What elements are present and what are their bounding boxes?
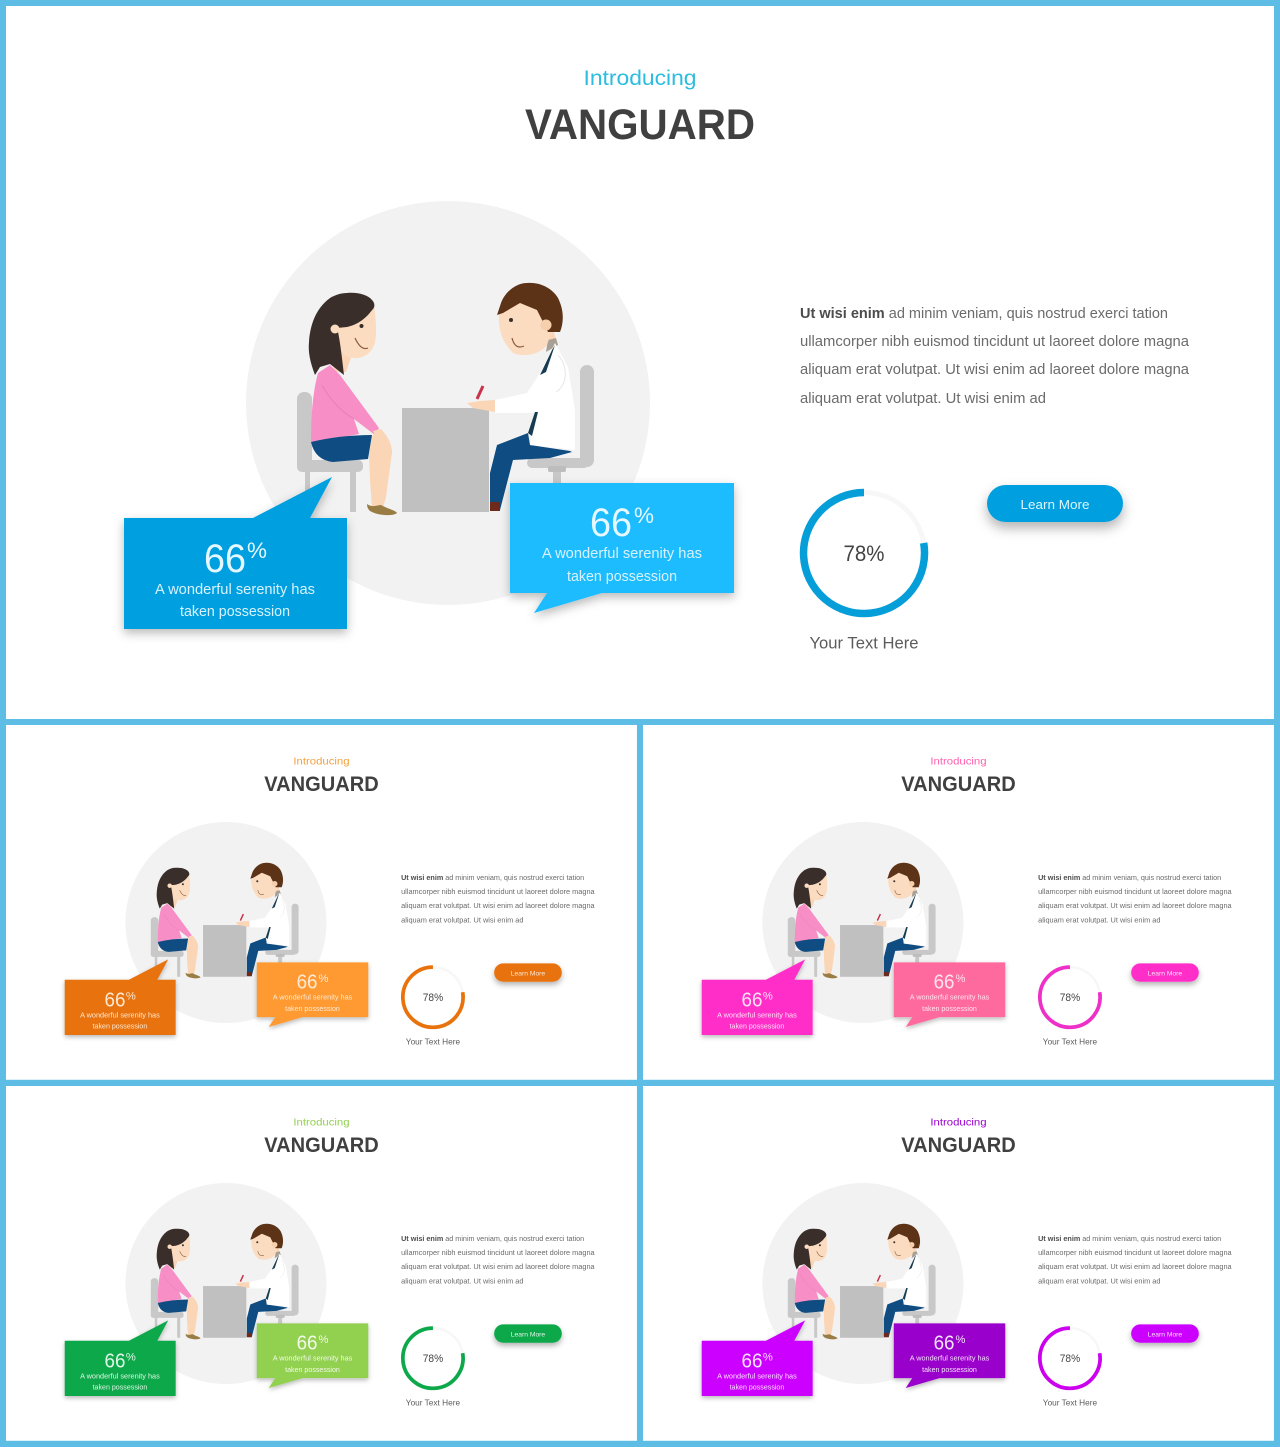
panel: blue main slide [6, 6, 1274, 719]
panel: pink slide [643, 725, 1274, 1080]
button: learn more [494, 963, 562, 982]
text block: Ut wisi enim ad minim veniam, quis nostrud exerci tation [1038, 1234, 1221, 1243]
donut chart: 78% [403, 967, 463, 1047]
callout: right [510, 483, 734, 613]
button: learn more: Learn More [511, 1331, 546, 1338]
callout: right: taken possession [285, 1365, 340, 1374]
text block: ullamcorper nibh euismod tincidunt ut laoreet dolore magna [401, 1248, 595, 1257]
illustration: patient and doctor at desk [762, 1183, 963, 1384]
callout: left [124, 477, 347, 629]
callout: left: A wonderful serenity has [155, 581, 315, 598]
subtitle: Introducing [293, 1117, 350, 1128]
callout: right: % [634, 503, 654, 528]
donut chart: 78% [1040, 967, 1100, 1047]
callout: left: 66 [742, 990, 762, 1012]
button: learn more: Learn More [511, 970, 546, 977]
title: VANGUARD [264, 1133, 379, 1157]
subtitle: Introducing [930, 1117, 987, 1128]
callout: left: A wonderful serenity has [717, 1011, 797, 1020]
text block [800, 306, 1190, 407]
button: learn more: Learn More [1148, 970, 1183, 977]
callout: right: % [318, 973, 329, 985]
callout: left: A wonderful serenity has [717, 1372, 797, 1381]
text block: ullamcorper nibh euismod tincidunt ut laoreet dolore magna [800, 334, 1190, 350]
title: VANGUARD [901, 1133, 1016, 1157]
callout: left: taken possession [180, 603, 290, 620]
callout: right: % [955, 1334, 966, 1346]
callout: right: % [955, 973, 966, 985]
text block: Ut wisi enim ad minim veniam, quis nostrud exerci tation [800, 306, 1168, 322]
illustration: patient and doctor at desk [125, 1183, 326, 1384]
panel: purple slide [643, 1086, 1274, 1441]
donut chart: 78% [1040, 1328, 1100, 1408]
callout: right: taken possession [567, 568, 677, 585]
button: learn more [494, 1324, 562, 1343]
title: VANGUARD [264, 772, 379, 796]
text block: aliquam erat volutpat. Ut wisi enim ad [800, 391, 1046, 407]
donut chart: 78%: 78% [1060, 1353, 1080, 1365]
text block [401, 1234, 595, 1286]
callout: right: taken possession [285, 1004, 340, 1013]
callout: left: 66 [105, 1351, 125, 1373]
callout: left: % [247, 538, 267, 563]
button: learn more [987, 485, 1123, 522]
callout: right: 66 [590, 501, 632, 545]
callout: left: taken possession [93, 1383, 147, 1392]
text block [401, 873, 595, 925]
subtitle: Introducing [930, 756, 987, 767]
subtitle: Introducing [584, 67, 696, 90]
donut chart: 78%: 78% [844, 541, 884, 566]
callout: right: A wonderful serenity has [273, 993, 353, 1002]
callout: left: % [126, 1352, 136, 1364]
donut chart: 78% [804, 492, 925, 652]
text block: aliquam erat volutpat. Ut wisi enim ad laoreet dolore magna [401, 901, 595, 910]
panel: green slide [6, 1086, 637, 1441]
illustration: patient and doctor at desk [125, 822, 326, 1023]
donut chart: 78%: Your Text Here [406, 1399, 460, 1408]
text block: Ut wisi enim ad minim veniam, quis nostrud exerci tation [401, 873, 584, 882]
callout: right: A wonderful serenity has [910, 993, 990, 1002]
donut chart: 78%: 78% [423, 1353, 443, 1365]
text block: aliquam erat volutpat. Ut wisi enim ad [401, 916, 524, 925]
callout: right: A wonderful serenity has [273, 1354, 353, 1363]
donut chart: 78%: Your Text Here [810, 634, 918, 652]
text block: aliquam erat volutpat. Ut wisi enim ad laoreet dolore magna [800, 362, 1190, 378]
callout: left: 66 [204, 537, 246, 581]
callout: left: A wonderful serenity has [80, 1372, 160, 1381]
donut chart: 78%: Your Text Here [1043, 1399, 1097, 1408]
subtitle: Introducing [293, 756, 350, 767]
callout: left: 66 [105, 990, 125, 1012]
callout: right: A wonderful serenity has [542, 545, 702, 562]
callout: left: 66 [742, 1351, 762, 1373]
donut chart: 78%: Your Text Here [406, 1038, 460, 1047]
title: VANGUARD [901, 772, 1016, 796]
illustration: patient and doctor at desk [246, 201, 650, 605]
callout: left: % [126, 991, 136, 1003]
callout: right: taken possession [922, 1365, 977, 1374]
text block [1038, 1234, 1232, 1286]
title: VANGUARD [525, 101, 755, 149]
callout: right: 66 [934, 1333, 954, 1355]
donut chart: 78%: 78% [1060, 992, 1080, 1004]
text block: aliquam erat volutpat. Ut wisi enim ad laoreet dolore magna [1038, 901, 1232, 910]
callout: left [65, 1320, 176, 1396]
text block: aliquam erat volutpat. Ut wisi enim ad [1038, 1277, 1161, 1286]
button: learn more: Learn More [1148, 1331, 1183, 1338]
text block: ullamcorper nibh euismod tincidunt ut laoreet dolore magna [1038, 1248, 1232, 1257]
callout: right [257, 1323, 368, 1388]
donut chart: 78%: 78% [423, 992, 443, 1004]
callout: left: % [763, 991, 773, 1003]
callout: right [894, 1323, 1005, 1388]
callout: right: taken possession [922, 1004, 977, 1013]
callout: right [894, 962, 1005, 1027]
text block: aliquam erat volutpat. Ut wisi enim ad [401, 1277, 524, 1286]
button: learn more: Learn More [1020, 497, 1090, 512]
donut chart: 78% [403, 1328, 463, 1408]
callout: left: taken possession [730, 1022, 784, 1031]
text block: aliquam erat volutpat. Ut wisi enim ad laoreet dolore magna [1038, 1262, 1232, 1271]
callout: right [257, 962, 368, 1027]
callout: left [702, 959, 813, 1035]
callout: right: 66 [297, 972, 317, 994]
text block: Ut wisi enim ad minim veniam, quis nostrud exerci tation [401, 1234, 584, 1243]
panel: orange slide [6, 725, 637, 1080]
callout: right: 66 [934, 972, 954, 994]
callout: right: A wonderful serenity has [910, 1354, 990, 1363]
callout: right: % [318, 1334, 329, 1346]
callout: left: taken possession [730, 1383, 784, 1392]
donut chart: 78%: Your Text Here [1043, 1038, 1097, 1047]
text block: ullamcorper nibh euismod tincidunt ut laoreet dolore magna [1038, 887, 1232, 896]
text block: Ut wisi enim ad minim veniam, quis nostrud exerci tation [1038, 873, 1221, 882]
button: learn more [1131, 1324, 1199, 1343]
callout: left [65, 959, 176, 1035]
callout: left: A wonderful serenity has [80, 1011, 160, 1020]
button: learn more [1131, 963, 1199, 982]
callout: left: taken possession [93, 1022, 147, 1031]
text block: ullamcorper nibh euismod tincidunt ut laoreet dolore magna [401, 887, 595, 896]
text block: aliquam erat volutpat. Ut wisi enim ad laoreet dolore magna [401, 1262, 595, 1271]
callout: left [702, 1320, 813, 1396]
callout: right: 66 [297, 1333, 317, 1355]
callout: left: % [763, 1352, 773, 1364]
text block [1038, 873, 1232, 925]
text block: aliquam erat volutpat. Ut wisi enim ad [1038, 916, 1161, 925]
illustration: patient and doctor at desk [762, 822, 963, 1023]
